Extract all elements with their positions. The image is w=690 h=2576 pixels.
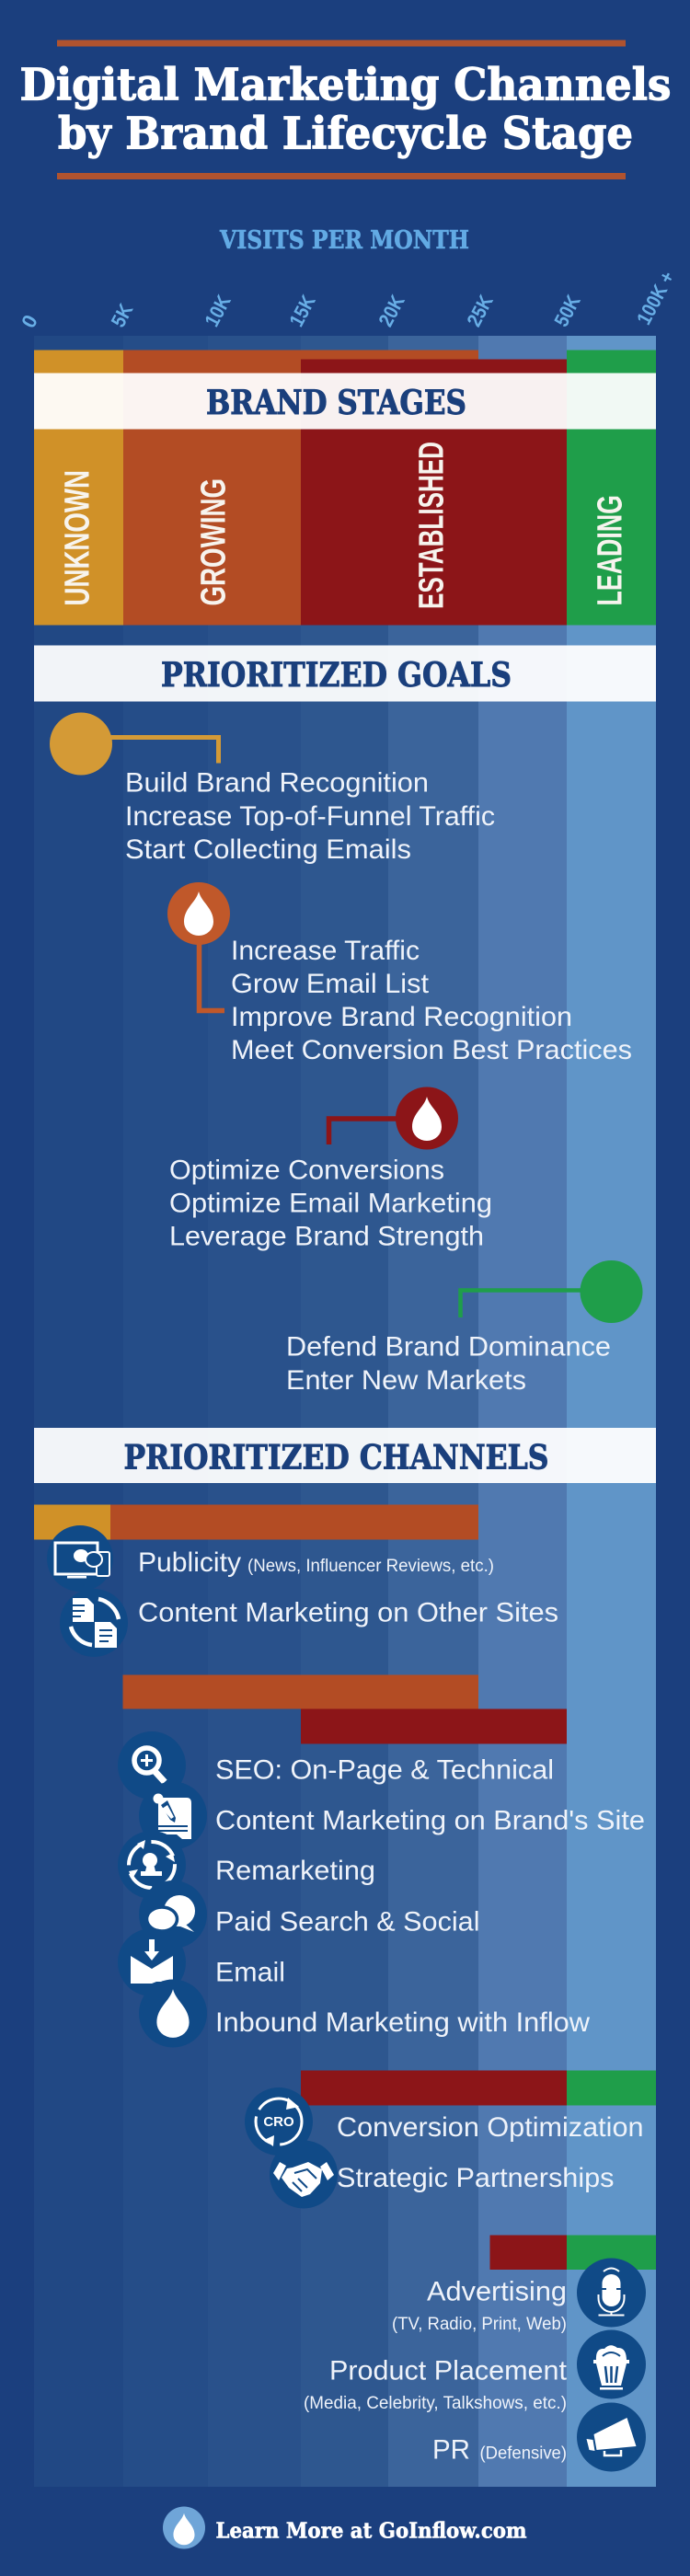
goal: leading [286,1260,642,1396]
panel: brand stages: LEADING [591,495,629,605]
goal: unknown: Start Collecting Emails [125,834,411,865]
channel: conversion optimization: Conversion Optimization [337,2112,644,2143]
title: Digital Marketing Channels [20,59,672,110]
axis labels: 5K [107,300,138,331]
axis labels [17,268,679,332]
channel: content marketing on other sites: Content Marketing on Other Sites [138,1597,558,1628]
goal: leading: Defend Brand Dominance [286,1332,611,1362]
goal: established: Leverage Brand Strength [169,1222,484,1251]
channel group 4: bar [489,2236,656,2270]
axis labels: 50K [549,291,585,330]
channel: strategic partnerships: Strategic Partnerships [337,2163,615,2193]
channel: remarketing [118,1831,375,1899]
channel: publicity [47,1525,494,1592]
channel: pr [432,2403,646,2471]
channel: remarketing: Remarketing [215,1856,375,1886]
channel: pr: (Defensive) [480,2444,567,2464]
goal: unknown: Build Brand Recognition [125,767,429,799]
channel: paid search and social: Paid Search & Social [215,1906,480,1938]
channel: content marketing on brand's site: Content Marketing on Brand's Site [215,1805,645,1836]
channel: email [118,1928,285,1996]
heading: prioritized channels [34,1428,656,1483]
goal: established: Optimize Email Marketing [169,1189,492,1218]
axis heading: visits per month: VISITS PER MONTH [219,226,469,255]
goal: established [169,1087,492,1251]
channel: content marketing on brand's site [139,1781,645,1849]
channel: advertising: Advertising [427,2276,567,2307]
channel: publicity: (News, Influencer Reviews, etc.) [247,1557,494,1576]
goal: growing: Grow Email List [231,969,430,999]
heading: prioritized goals [34,646,656,701]
channel: product placement: (Media, Celebrity, Talkshows, etc.) [304,2394,567,2413]
channel: paid search and social [139,1880,480,1949]
channel: inbound marketing with inflow [139,1980,590,2048]
panel: brand stages: GROWING [195,478,234,605]
goal: growing: Increase Traffic [231,936,420,966]
panel: brand stages: BRAND STAGES [206,384,466,422]
goal: established: Optimize Conversions [169,1156,444,1185]
goal: unknown [50,712,495,865]
channel: product placement [304,2329,646,2413]
axis labels: 25K [462,291,498,330]
axis labels: 20K [374,291,409,330]
panel: brand stages [34,350,656,626]
axis labels: 0 [17,311,42,332]
title: by Brand Lifecycle Stage [58,109,633,160]
channel: conversion optimization: CRO [263,2114,294,2130]
background columns [34,336,656,2487]
goal: growing [167,882,632,1065]
channel group 1: bar [34,1505,478,1540]
heading: prioritized goals: PRIORITIZED GOALS [161,656,512,695]
heading: prioritized channels: PRIORITIZED CHANNELS [123,1439,548,1478]
channel group 3: bar [301,2070,656,2105]
channel: email: Email [215,1958,285,1987]
channel: pr: PR [432,2434,470,2466]
channel: content marketing on other sites [60,1589,558,1657]
channel: seo [118,1731,554,1800]
goal: leading: Enter New Markets [286,1365,526,1396]
panel: brand stages: ESTABLISHED [412,442,451,609]
axis labels: 15K [284,291,320,330]
channel: publicity: Publicity [138,1547,241,1578]
channel group 2: bars [123,1674,567,1744]
panel: brand stages: UNKNOWN [59,470,98,605]
footer call to action: Learn More at GoInflow.com [215,2519,526,2543]
channel: product placement: Product Placement [329,2355,568,2386]
channel: conversion optimization [245,2087,644,2156]
axis labels: 100K + [632,268,679,328]
channel: inbound marketing with inflow: Inbound Marketing with Inflow [215,2007,590,2038]
goal: growing: Meet Conversion Best Practices [231,1035,632,1065]
goal: unknown: Increase Top-of-Funnel Traffic [125,801,495,832]
channel: advertising [392,2258,646,2334]
axis labels: 10K [200,291,236,330]
footer call to action [163,2506,526,2548]
title [20,40,672,179]
channel: seo: SEO: On-Page & Technical [215,1755,554,1785]
channel: strategic partnerships [270,2140,615,2208]
channel: advertising: (TV, Radio, Print, Web) [392,2315,567,2334]
goal: growing: Improve Brand Recognition [231,1002,572,1032]
